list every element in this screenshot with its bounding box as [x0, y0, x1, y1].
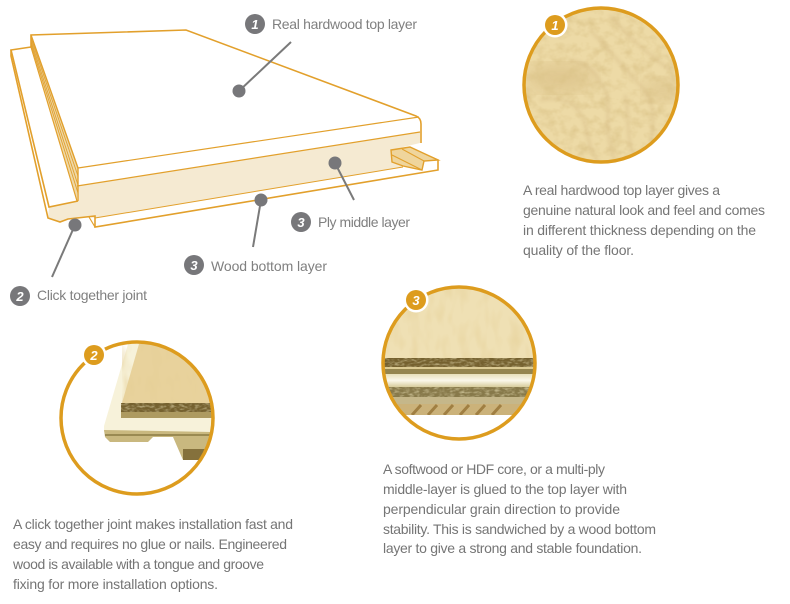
- callout: real hardwood top layer: [232, 14, 417, 98]
- badge 2: [82, 342, 106, 368]
- tongue: [391, 147, 438, 170]
- callout: wood bottom layer: [184, 194, 327, 275]
- text block: click together joint: fixing for more installation options.: [13, 576, 218, 592]
- text block: core and bottom layer: perpendicular grain direction to provide: [383, 501, 620, 517]
- text block: click together joint: wood is available with a tongue and groove: [12, 556, 264, 572]
- callout: click together joint: 2: [15, 289, 24, 304]
- text block: core and bottom layer: middle-layer is glued to the top layer with: [383, 481, 627, 497]
- plank middle ply layer: [48, 132, 420, 222]
- text block: hardwood top layer: in different thickness depending on the: [523, 222, 756, 238]
- callout: wood bottom layer: Wood bottom layer: [211, 258, 327, 274]
- callout: click together joint: Click together joint: [37, 287, 147, 303]
- text block: hardwood top layer: quality of the floor.: [523, 242, 634, 258]
- plank outlines: [11, 30, 438, 227]
- text block: click together joint: A click together joint makes installation fast and: [13, 516, 293, 532]
- text block: core and bottom layer: A softwood or HDF core, or a multi-ply: [383, 461, 605, 477]
- badge 3: [404, 288, 428, 312]
- badge 1: [542, 12, 568, 38]
- groove hatched edge: [31, 35, 78, 201]
- callout: real hardwood top layer: Real hardwood top layer: [272, 16, 417, 32]
- text block: hardwood top layer: genuine natural look and feel and comes: [523, 202, 765, 218]
- plank illustration: [11, 30, 438, 227]
- text block: core and bottom layer: layer to give a strong and stable foundation.: [383, 540, 642, 556]
- badge 3: 3: [412, 293, 420, 308]
- detail circle 1: hardwood top layer: [520, 5, 682, 165]
- callout: wood bottom layer: 3: [190, 258, 198, 273]
- detail circle 2: click joint cross section: [61, 342, 215, 494]
- text block: core and bottom layer: stability. This is sandwiched by a wood bottom: [383, 521, 656, 537]
- badge 1: 1: [551, 18, 559, 33]
- callout: real hardwood top layer: 1: [251, 17, 259, 32]
- text block: click together joint: [12, 516, 293, 592]
- callout: ply middle layer: [291, 156, 410, 232]
- callout: ply middle layer: Ply middle layer: [318, 214, 410, 230]
- text block: hardwood top layer: A real hardwood top layer gives a: [523, 182, 720, 198]
- text block: hardwood top layer: [523, 182, 765, 258]
- callout: ply middle layer: 3: [297, 215, 305, 230]
- callout: click together joint: [10, 218, 147, 306]
- text block: click together joint: easy and requires no glue or nails. Engineered: [13, 536, 287, 552]
- detail circle 3: layered cross section: [380, 285, 540, 445]
- badge 2: 2: [89, 348, 98, 363]
- text block: core and bottom layer: [383, 461, 656, 556]
